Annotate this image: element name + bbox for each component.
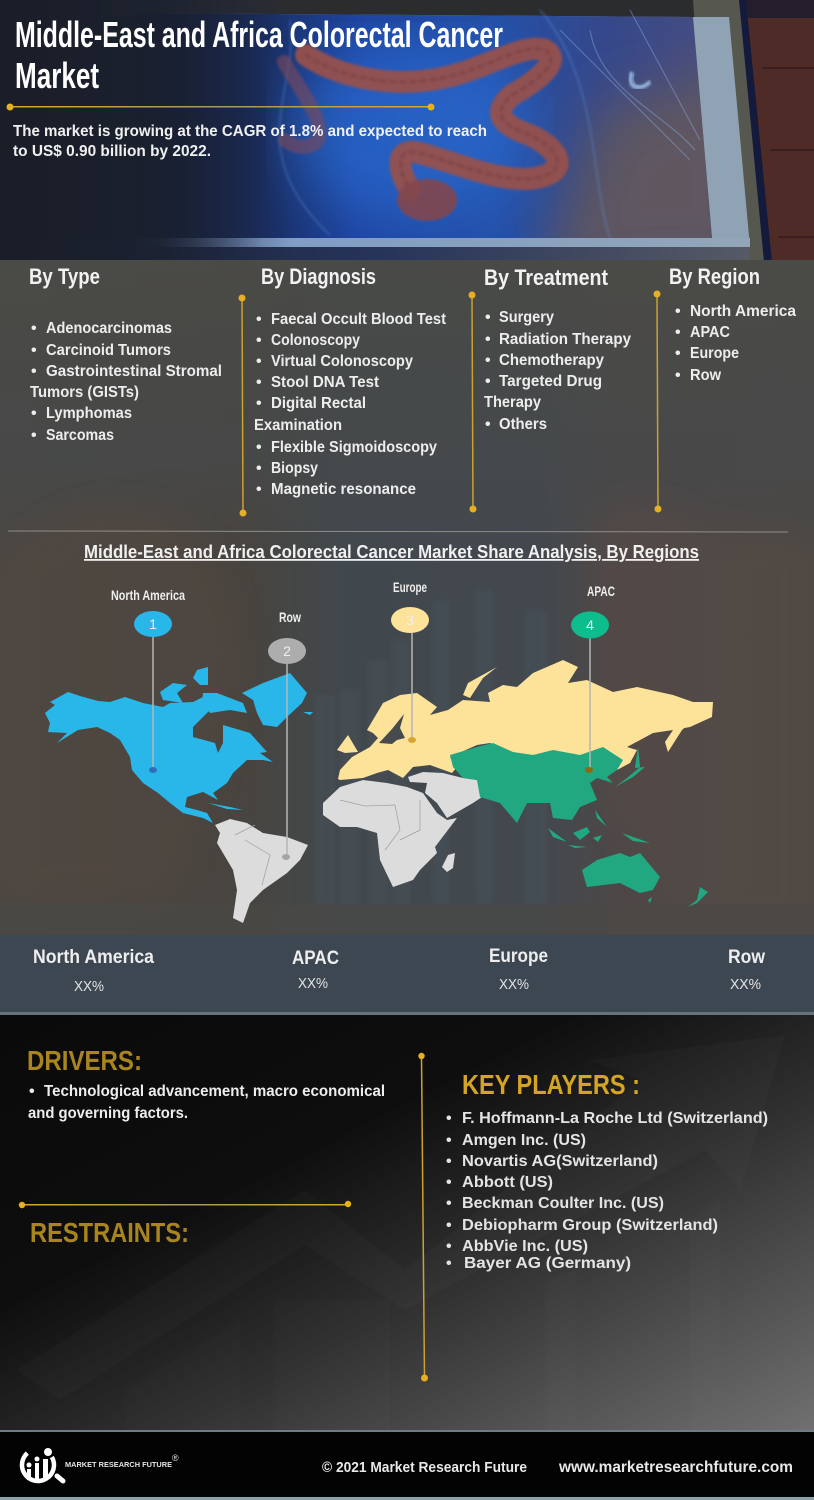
divider: drivers and restraints xyxy=(19,1201,351,1208)
region: row americas and africa xyxy=(215,772,482,923)
stat: north america: North America xyxy=(33,947,154,968)
list: diagnosis items: Digital Rectal xyxy=(271,395,366,412)
list: companies: Novartis AG(Switzerland) xyxy=(462,1153,658,1170)
list: diagnosis items: • xyxy=(256,460,262,477)
stat: north america xyxy=(33,947,154,995)
region: apac xyxy=(450,743,708,907)
list: treatment items: Targeted Drug xyxy=(499,373,602,390)
text: brand name: ® xyxy=(172,1453,179,1463)
list: treatment items: • xyxy=(485,352,491,369)
pin: north america: North America xyxy=(111,587,185,603)
list: companies: AbbVie Inc. (US) xyxy=(462,1238,588,1255)
list: companies: Beckman Coulter Inc. (US) xyxy=(462,1195,664,1212)
list: companies: • xyxy=(446,1195,452,1212)
stat: europe: Europe xyxy=(489,946,548,967)
region: europe xyxy=(337,660,713,780)
stat: row: XX% xyxy=(730,976,761,993)
subtitle: The market is growing at the CAGR of 1.8% and expected to reach xyxy=(13,123,487,140)
heading: by treatment: By Treatment xyxy=(484,265,609,290)
pin: north america: 1 xyxy=(149,616,157,632)
list: type items: Tumors (GISTs) xyxy=(30,384,139,401)
list: diagnosis items: Colonoscopy xyxy=(271,332,360,349)
divider: key players vertical xyxy=(418,1053,428,1382)
list: treatment items: Surgery xyxy=(499,309,554,326)
list: region items: • xyxy=(675,303,681,320)
list: region items: Row xyxy=(690,367,722,384)
pin: apac xyxy=(571,583,615,773)
list: region items: North America xyxy=(690,303,796,320)
list: treatment items: Chemotherapy xyxy=(499,352,604,369)
pin: europe xyxy=(391,579,429,743)
list: type items: • xyxy=(31,342,37,359)
region: north america xyxy=(45,667,313,823)
pin: europe: 3 xyxy=(406,612,414,628)
pin: apac: 4 xyxy=(586,617,594,633)
heading: market share analysis: Middle-East and Africa Colorectal Cancer Market Share Analysis, By Regions xyxy=(84,542,699,562)
list: diagnosis items: • xyxy=(256,481,262,498)
list: companies: • xyxy=(446,1110,452,1127)
text: drivers body: • xyxy=(29,1083,35,1100)
stat: row: Row xyxy=(728,947,765,968)
list: treatment items: • xyxy=(485,373,491,390)
list: treatment items: • xyxy=(485,309,491,326)
list: companies: • xyxy=(446,1217,452,1234)
panel: region share band xyxy=(0,935,814,1015)
list: type items: • xyxy=(31,427,37,444)
panel: hero image background xyxy=(0,0,814,280)
list: companies: Amgen Inc. (US) xyxy=(462,1132,586,1149)
list: region items: Europe xyxy=(690,345,739,362)
text: drivers body: Technological advancement, macro economical xyxy=(44,1083,385,1100)
heading: restraints: RESTRAINTS: xyxy=(30,1217,189,1248)
list: companies: Bayer AG (Germany) xyxy=(464,1255,631,1272)
pin: row: 2 xyxy=(283,643,291,659)
list: diagnosis items: Virtual Colonoscopy xyxy=(271,353,413,370)
list: region items xyxy=(675,303,796,384)
pin: row: Row xyxy=(279,609,301,625)
list: companies: • xyxy=(446,1153,452,1170)
chart: world map by region xyxy=(45,579,713,923)
stat: europe xyxy=(489,946,548,993)
panel: by treatment xyxy=(484,265,631,433)
list: type items: Adenocarcinomas xyxy=(46,320,172,337)
heading: by diagnosis: By Diagnosis xyxy=(261,264,376,289)
title: Middle-East and Africa Colorectal Cancer xyxy=(15,14,503,55)
pin: north america xyxy=(111,587,185,773)
panel: by type xyxy=(29,264,222,444)
illustration: colon xyxy=(284,49,558,221)
heading: drivers: DRIVERS: xyxy=(27,1045,142,1076)
stat: apac: APAC xyxy=(292,948,339,969)
heading: by region: By Region xyxy=(669,264,760,289)
list: type items: • xyxy=(31,363,37,380)
list: diagnosis items: Stool DNA Test xyxy=(271,374,380,391)
list: type items: Carcinoid Tumors xyxy=(46,342,171,359)
text: brand name: MARKET RESEARCH FUTURE xyxy=(65,1462,172,1469)
list: treatment items: • xyxy=(485,416,491,433)
list: companies: • xyxy=(446,1238,452,1255)
list: region items: • xyxy=(675,367,681,384)
list: companies: • xyxy=(446,1132,452,1149)
list: type items xyxy=(30,320,222,444)
heading: key players: KEY PLAYERS : xyxy=(462,1069,640,1100)
subtitle xyxy=(13,123,487,160)
list: companies: Debiopharm Group (Switzerland) xyxy=(462,1217,718,1234)
list: type items: Gastrointestinal Stromal xyxy=(46,363,222,380)
text: copyright: © 2021 Market Research Future xyxy=(322,1459,527,1476)
panel: drivers restraints key players background xyxy=(0,1015,814,1432)
stat: apac: XX% xyxy=(298,975,328,992)
list: type items: Lymphomas xyxy=(46,405,132,422)
list: treatment items xyxy=(484,309,631,433)
pin: europe: Europe xyxy=(393,579,427,595)
list: region items: • xyxy=(675,345,681,362)
list: type items: • xyxy=(31,405,37,422)
list: diagnosis items: • xyxy=(256,311,262,328)
list: diagnosis items: Examination xyxy=(254,417,342,434)
list: companies: Abbott (US) xyxy=(462,1174,553,1191)
stat: north america: XX% xyxy=(74,978,104,995)
list: treatment items: Radiation Therapy xyxy=(499,331,631,348)
list: treatment items: Others xyxy=(499,416,547,433)
pin: row xyxy=(268,609,306,860)
heading: by type: By Type xyxy=(29,264,100,289)
text: website: www.marketresearchfuture.com xyxy=(558,1459,793,1476)
list: diagnosis items xyxy=(254,311,447,498)
icon: market research future logo xyxy=(16,1443,63,1487)
stat: europe: XX% xyxy=(499,976,529,993)
list: diagnosis items: • xyxy=(256,353,262,370)
title xyxy=(15,14,503,96)
list: companies: • xyxy=(446,1174,452,1191)
list: region items: • xyxy=(675,324,681,341)
list: diagnosis items: • xyxy=(256,395,262,412)
title: Market xyxy=(15,55,99,96)
list: diagnosis items: • xyxy=(256,439,262,456)
list: diagnosis items: Flexible Sigmoidoscopy xyxy=(271,439,437,456)
list: diagnosis items: Faecal Occult Blood Test xyxy=(271,311,447,328)
list: companies: • xyxy=(446,1255,452,1272)
list: companies: F. Hoffmann-La Roche Ltd (Switzerland) xyxy=(462,1110,768,1127)
text: drivers body: and governing factors. xyxy=(28,1105,188,1122)
list: diagnosis items: • xyxy=(256,374,262,391)
panel: segmentation and map background xyxy=(0,260,814,1015)
pin: apac: APAC xyxy=(587,583,615,599)
stat: apac xyxy=(292,948,339,992)
panel: by diagnosis xyxy=(254,264,447,498)
panel: drivers xyxy=(27,1045,385,1122)
list: diagnosis items: Magnetic resonance xyxy=(271,481,416,498)
list: treatment items: • xyxy=(485,331,491,348)
text: drivers body xyxy=(28,1083,385,1122)
panel: by region xyxy=(669,264,796,384)
list: region items: APAC xyxy=(690,324,730,341)
list: type items: • xyxy=(31,320,37,337)
list: diagnosis items: Biopsy xyxy=(271,460,318,477)
list: companies xyxy=(446,1110,768,1272)
panel: key players xyxy=(446,1069,768,1272)
text: brand name xyxy=(65,1453,179,1469)
stat: row xyxy=(728,947,765,993)
list: type items: Sarcomas xyxy=(46,427,114,444)
dividers: gold vertical separators xyxy=(238,290,662,516)
subtitle: to US$ 0.90 billion by 2022. xyxy=(13,143,211,160)
list: treatment items: Therapy xyxy=(484,394,541,411)
list: diagnosis items: • xyxy=(256,332,262,349)
divider: hero gold line xyxy=(6,104,434,110)
panel: footer xyxy=(0,1430,814,1500)
